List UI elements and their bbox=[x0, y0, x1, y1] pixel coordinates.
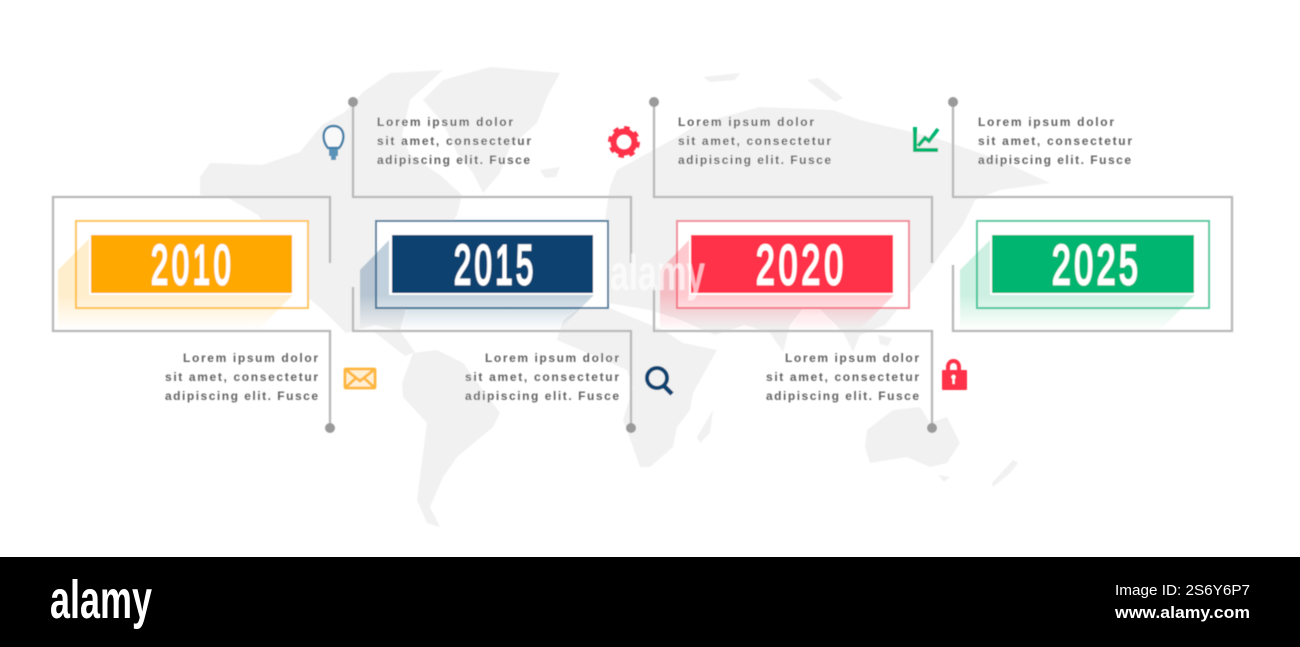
text block: 2015 bottom bbox=[465, 351, 619, 403]
year badge: 2010 bbox=[58, 221, 308, 330]
icon: envelope bbox=[345, 369, 375, 388]
text block: 2020 top: adipiscing elit. Fusce bbox=[678, 153, 831, 167]
text block: 2015 top: sit amet, consectetur bbox=[377, 134, 531, 148]
icon: light bulb bbox=[324, 126, 343, 160]
panel: 2015 frame bbox=[348, 97, 636, 433]
year badge: 2015 bbox=[360, 221, 608, 330]
text block: 2010 bottom: adipiscing elit. Fusce bbox=[165, 389, 318, 403]
icon: padlock bbox=[942, 361, 967, 390]
text block: 2010 bottom: sit amet, consectetur bbox=[165, 370, 318, 384]
logo: alamy: alamy bbox=[50, 570, 152, 630]
text block: 2015 bottom: adipiscing elit. Fusce bbox=[465, 389, 619, 403]
text block: 2020 bottom bbox=[766, 351, 919, 403]
panel: 2020 frame bbox=[649, 97, 937, 433]
text block: 2020 bottom: Lorem ipsum dolor bbox=[785, 351, 919, 365]
text block: 2010 bottom bbox=[165, 351, 318, 403]
website: www.alamy.com bbox=[1114, 603, 1250, 622]
text block: 2015 top: adipiscing elit. Fusce bbox=[377, 153, 530, 167]
text block: 2025 top: sit amet, consectetur bbox=[978, 134, 1132, 148]
text block: 2020 bottom: sit amet, consectetur bbox=[766, 370, 919, 384]
year badge: 2020 bbox=[660, 221, 909, 330]
panel: 2025 frame bbox=[948, 97, 1232, 331]
footer bar bbox=[0, 557, 1300, 647]
icon: growth chart bbox=[915, 127, 938, 150]
year badge: 2020: 2020 bbox=[756, 233, 843, 296]
text block: 2015 bottom: Lorem ipsum dolor bbox=[485, 351, 619, 365]
world map background bbox=[200, 67, 1050, 527]
icon: magnifier bbox=[647, 368, 672, 394]
text block: 2025 top: Lorem ipsum dolor bbox=[978, 115, 1114, 129]
panel: 2010 frame bbox=[53, 197, 335, 433]
year badge: 2015: 2015 bbox=[454, 233, 533, 296]
year badge: 2025: 2025 bbox=[1052, 233, 1138, 296]
year badge: 2025 bbox=[960, 221, 1209, 330]
text block: 2020 top bbox=[678, 115, 831, 167]
text block: 2020 bottom: adipiscing elit. Fusce bbox=[766, 389, 919, 403]
text block: 2020 top: sit amet, consectetur bbox=[678, 134, 831, 148]
icon: gear bbox=[610, 128, 638, 156]
text block: 2025 top bbox=[978, 115, 1132, 167]
image id: Image ID: 2S6Y6P7 bbox=[1115, 582, 1250, 599]
text block: 2015 bottom: sit amet, consectetur bbox=[465, 370, 619, 384]
text block: 2020 top: Lorem ipsum dolor bbox=[678, 115, 814, 129]
text block: 2015 top: Lorem ipsum dolor bbox=[377, 115, 513, 129]
text block: 2015 top bbox=[377, 115, 531, 167]
watermark: alamy bbox=[610, 245, 705, 301]
year badge: 2010: 2010 bbox=[151, 233, 231, 296]
text block: 2025 top: adipiscing elit. Fusce bbox=[978, 153, 1131, 167]
text block: 2010 bottom: Lorem ipsum dolor bbox=[183, 351, 318, 365]
